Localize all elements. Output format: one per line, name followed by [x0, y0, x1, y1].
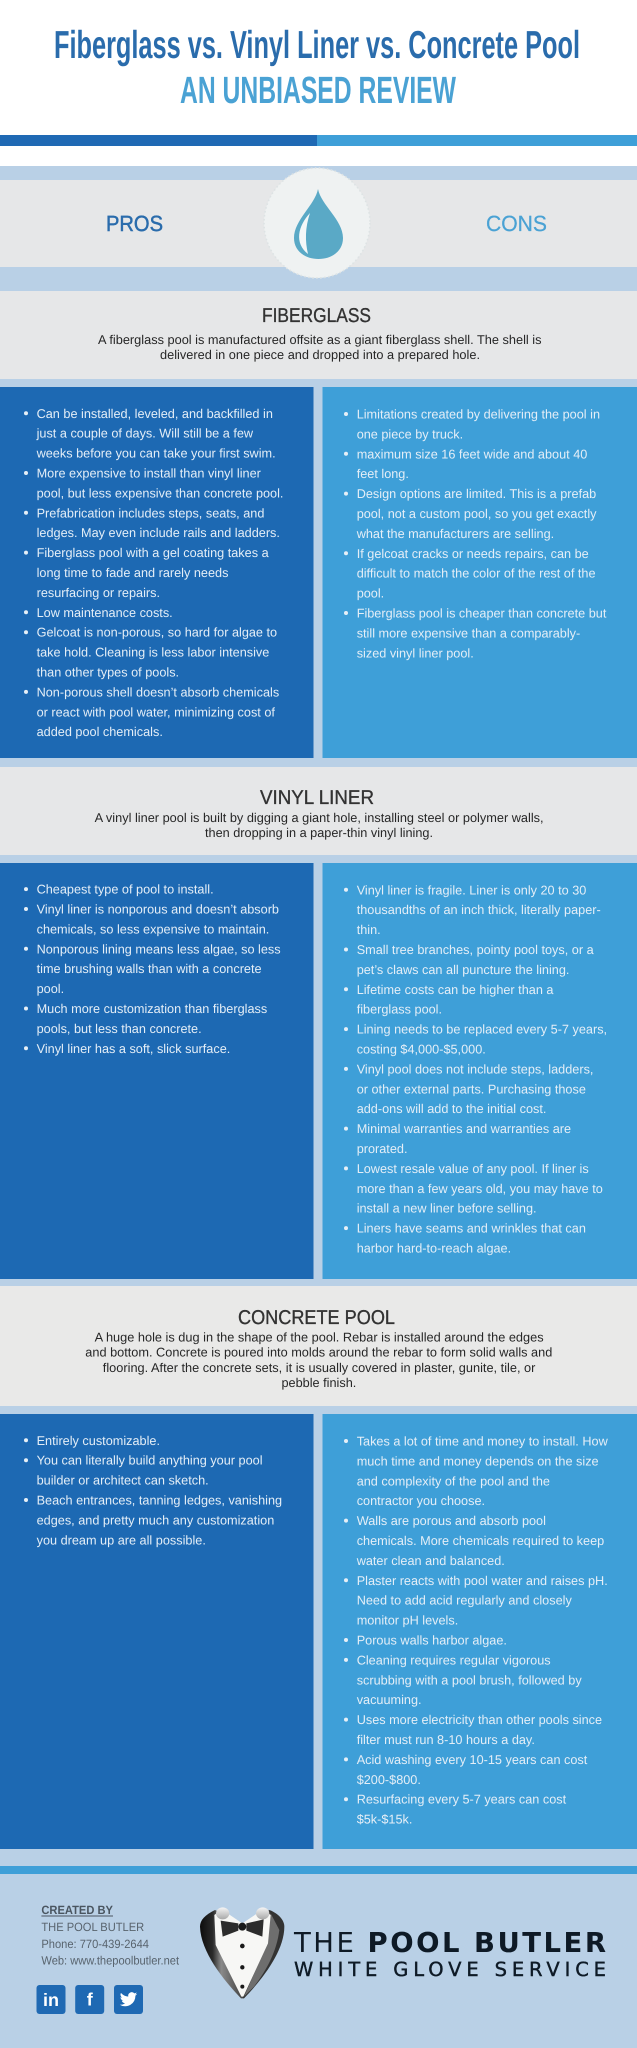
subtitle: AN UNBIASED REVIEW: [180, 70, 456, 112]
panel: vinyl liner cons: install a new liner before selling.: [357, 1202, 537, 1216]
contact details: [41, 1920, 180, 1968]
header divider bar: [0, 135, 637, 146]
panel: vinyl liner pros: time brushing walls than with a concrete: [37, 962, 262, 976]
contact details: THE POOL BUTLER: [41, 1920, 145, 1934]
panel: fiberglass pros: ledges. May even include rails and ladders.: [37, 526, 280, 540]
description: concrete pool: flooring. After the concrete sets, it is usually covered in plaster, gunite, tile, or: [103, 1361, 536, 1375]
contact details: Web: www.thepoolbutler.net: [41, 1954, 180, 1968]
panel: vinyl liner pros: chemicals, so less expensive to maintain.: [37, 922, 269, 936]
panel: vinyl liner cons: Lining needs to be replaced every 5-7 years,: [357, 1023, 607, 1037]
panel: concrete pool pros: builder or architect can sketch.: [37, 1474, 209, 1488]
section: vinyl liner: [0, 767, 637, 1286]
description: fiberglass: delivered in one piece and dropped into a prepared hole.: [160, 348, 480, 362]
section: concrete pool: [0, 1286, 637, 2048]
panel: fiberglass pros: long time to fade and rarely needs: [37, 566, 228, 580]
panel: fiberglass cons: pool, not a custom pool, so you get exactly: [357, 507, 597, 521]
panel: fiberglass cons: sized vinyl liner pool.: [357, 646, 474, 660]
panel: concrete pool cons: Plaster reacts with pool water and raises pH.: [357, 1574, 608, 1588]
panel: concrete pool pros: edges, and pretty much any customization: [37, 1513, 274, 1527]
description: vinyl liner: A vinyl liner pool is built by digging a giant hole, installing steel or polymer walls,: [95, 811, 544, 825]
panel: fiberglass cons: one piece by truck.: [357, 427, 463, 441]
panel: concrete pool pros: Entirely customizable.: [37, 1434, 160, 1448]
panel: concrete pool cons: much time and money depends on the size: [357, 1454, 599, 1468]
description: concrete pool: and bottom. Concrete is poured into molds around the rebar to form solid walls and: [85, 1346, 552, 1360]
panel: concrete pool cons: Cleaning requires regular vigorous: [357, 1653, 551, 1667]
panel: concrete pool cons: scrubbing with a pool brush, followed by: [357, 1673, 582, 1687]
header: title block: [54, 24, 580, 112]
panel: fiberglass pros: Prefabrication includes steps, seats, and: [37, 506, 264, 520]
panel: fiberglass pros: just a couple of days. Will still be a few: [36, 427, 254, 441]
panel: fiberglass cons: Design options are limited. This is a prefab: [357, 487, 596, 501]
panel: vinyl liner cons: or other external parts. Purchasing those: [357, 1082, 586, 1096]
panel: fiberglass cons: Limitations created by delivering the pool in: [357, 408, 600, 422]
panel: fiberglass cons: what the manufacturers are selling.: [356, 527, 554, 541]
panel: fiberglass pros: More expensive to install than vinyl liner: [37, 466, 262, 480]
panel: concrete pool pros: You can literally build anything your pool: [37, 1454, 263, 1468]
panel: concrete pool cons: water clean and balanced.: [356, 1554, 505, 1568]
description: concrete pool: pebble finish.: [282, 1376, 356, 1390]
panel: vinyl liner cons: thin.: [357, 923, 381, 937]
panel: fiberglass pros: Fiberglass pool with a gel coating takes a: [37, 546, 270, 560]
panel: fiberglass pros: Non-porous shell doesn’t absorb chemicals: [37, 685, 279, 699]
panel: concrete pool cons: Acid washing every 10-15 years can cost: [357, 1753, 588, 1767]
panel: fiberglass cons: pool.: [357, 587, 384, 601]
panel: concrete pool cons: Need to add acid regularly and closely: [357, 1594, 572, 1608]
description: concrete pool: A huge hole is dug in the shape of the pool. Rebar is installed around the edges: [95, 1330, 544, 1344]
panel: fiberglass pros: than other types of pools.: [37, 666, 179, 680]
pros heading: PROS: [106, 211, 163, 236]
panel: fiberglass pros: [0, 387, 314, 758]
panel: fiberglass pros: take hold. Cleaning is less labor intensive: [37, 646, 269, 660]
panel: fiberglass pros: Can be installed, leveled, and backfilled in: [37, 407, 273, 421]
panel: concrete pool cons: $200-$800.: [357, 1773, 421, 1787]
panel: concrete pool cons: $5k-$15k.: [357, 1813, 412, 1827]
brand name: THE POOL BUTLER: [293, 1927, 606, 1959]
icon: facebook: f: [87, 1990, 94, 2010]
panel: vinyl liner cons: Minimal warranties and warranties are: [357, 1122, 571, 1136]
panel: fiberglass pros: added pool chemicals.: [37, 725, 163, 739]
credit heading: CREATED BY: [41, 1903, 113, 1917]
panel: vinyl liner cons: costing $4,000-$5,000.: [357, 1042, 486, 1056]
panel: fiberglass cons: Fiberglass pool is cheaper than concrete but: [357, 606, 607, 620]
panel: vinyl liner pros: Cheapest type of pool to install.: [37, 883, 214, 897]
description: vinyl liner: then dropping in a paper-thin vinyl lining.: [205, 826, 433, 840]
logo wordmark: [293, 1927, 606, 1981]
panel: vinyl liner pros: pools, but less than concrete.: [37, 1022, 202, 1036]
panel: fiberglass pros: resurfacing or repairs.: [37, 586, 160, 600]
panel: vinyl liner cons: Lowest resale value of any pool. If liner is: [357, 1162, 589, 1176]
panel: concrete pool pros: [0, 1414, 314, 1849]
panel: concrete pool pros: you dream up are all possible.: [37, 1533, 206, 1547]
panel: concrete pool cons: [322, 1414, 637, 1849]
panel: concrete pool cons: Takes a lot of time and money to install. How: [357, 1434, 609, 1448]
panel: concrete pool cons: Uses more electricity than other pools since: [357, 1713, 602, 1727]
panel: vinyl liner cons: [322, 863, 637, 1279]
panel: fiberglass cons: If gelcoat cracks or needs repairs, can be: [357, 547, 589, 561]
panel: vinyl liner pros: Nonporous lining means less algae, so less: [37, 942, 281, 956]
panel: vinyl liner pros: Vinyl liner is nonporous and doesn’t absorb: [37, 902, 279, 916]
panel: vinyl liner cons: pet’s claws can all puncture the lining.: [357, 963, 569, 977]
footer: credits: [41, 1903, 180, 1968]
panel: fiberglass cons: [322, 387, 637, 758]
panel: vinyl liner pros: Much more customization than fiberglass: [37, 1002, 267, 1016]
panel: fiberglass pros: Gelcoat is non-porous, so hard for algae to: [37, 626, 277, 640]
social icons: [36, 1985, 143, 2014]
panel: concrete pool cons: chemicals. More chemicals required to keep: [357, 1534, 604, 1548]
panel: vinyl liner cons: thousandths of an inch thick, literally paper-: [357, 903, 601, 917]
panel: vinyl liner pros: pool.: [37, 982, 64, 996]
panel: vinyl liner cons: Vinyl pool does not include steps, ladders,: [357, 1062, 593, 1076]
panel: concrete pool cons: monitor pH levels.: [357, 1614, 458, 1628]
panel: concrete pool cons: Resurfacing every 5-7 years can cost: [357, 1793, 567, 1807]
panel: fiberglass pros: pool, but less expensive than concrete pool.: [37, 486, 283, 500]
panel: vinyl liner cons: more than a few years old, you may have to: [357, 1182, 603, 1196]
panel: concrete pool cons: contractor you choose.: [357, 1494, 485, 1508]
description: fiberglass: A fiberglass pool is manufactured offsite as a giant fiberglass shell. The shell is: [98, 333, 542, 347]
panel: fiberglass cons: still more expensive than a comparably-: [357, 626, 580, 640]
panel: fiberglass cons: maximum size 16 feet wide and about 40: [357, 447, 587, 461]
description: vinyl liner: [95, 811, 544, 840]
description: concrete pool: [85, 1330, 552, 1390]
panel: concrete pool cons: vacuuming.: [357, 1693, 422, 1707]
description: fiberglass: [98, 333, 542, 362]
icon: water drop in circle: [264, 168, 370, 278]
panel: concrete pool cons: filter must run 8-10 hours a day.: [357, 1733, 535, 1747]
panel: vinyl liner cons: fiberglass pool.: [357, 1003, 442, 1017]
panel: vinyl liner pros: Vinyl liner has a soft, slick surface.: [37, 1042, 230, 1056]
panel: fiberglass cons: feet long.: [357, 467, 409, 481]
panel: vinyl liner cons: add-ons will add to the initial cost.: [357, 1102, 546, 1116]
panel: vinyl liner cons: Vinyl liner is fragile. Liner is only 20 to 30: [357, 883, 586, 897]
panel: fiberglass pros: weeks before you can take your first swim.: [36, 447, 276, 461]
section: fiberglass: [0, 291, 637, 767]
brand tagline: WHITE GLOVE SERVICE: [294, 1958, 606, 1981]
heading: concrete pool: CONCRETE POOL: [238, 1307, 395, 1329]
panel: vinyl liner cons: Lifetime costs can be higher than a: [357, 983, 554, 997]
panel: concrete pool cons: Walls are porous and absorb pool: [357, 1514, 546, 1528]
footer stripe: [0, 1866, 637, 1874]
icon: twitter: [114, 1985, 143, 2014]
panel: concrete pool cons: and complexity of the pool and the: [357, 1474, 550, 1488]
panel: vinyl liner cons: Small tree branches, pointy pool toys, or a: [357, 943, 595, 957]
icon: linkedin: in: [43, 1990, 59, 2010]
logo: tuxedo: [200, 1907, 284, 1998]
contact details: Phone: 770-439-2644: [41, 1937, 149, 1951]
panel: fiberglass pros: Low maintenance costs.: [37, 606, 173, 620]
panel: vinyl liner cons: Liners have seams and wrinkles that can: [357, 1222, 586, 1236]
cons heading: CONS: [486, 211, 547, 236]
panel: concrete pool cons: Porous walls harbor algae.: [357, 1634, 507, 1648]
panel: fiberglass pros: or react with pool water, minimizing cost of: [37, 705, 275, 719]
panel: concrete pool pros: Beach entrances, tanning ledges, vanishing: [37, 1494, 282, 1508]
panel: fiberglass cons: difficult to match the color of the rest of the: [357, 567, 596, 581]
panel: vinyl liner cons: harbor hard-to-reach algae.: [357, 1242, 511, 1256]
panel: vinyl liner cons: prorated.: [357, 1142, 407, 1156]
pros and cons banner: [0, 166, 637, 291]
heading: vinyl liner: VINYL LINER: [260, 787, 374, 809]
heading: fiberglass: FIBERGLASS: [262, 305, 371, 327]
panel: vinyl liner pros: [0, 863, 314, 1279]
